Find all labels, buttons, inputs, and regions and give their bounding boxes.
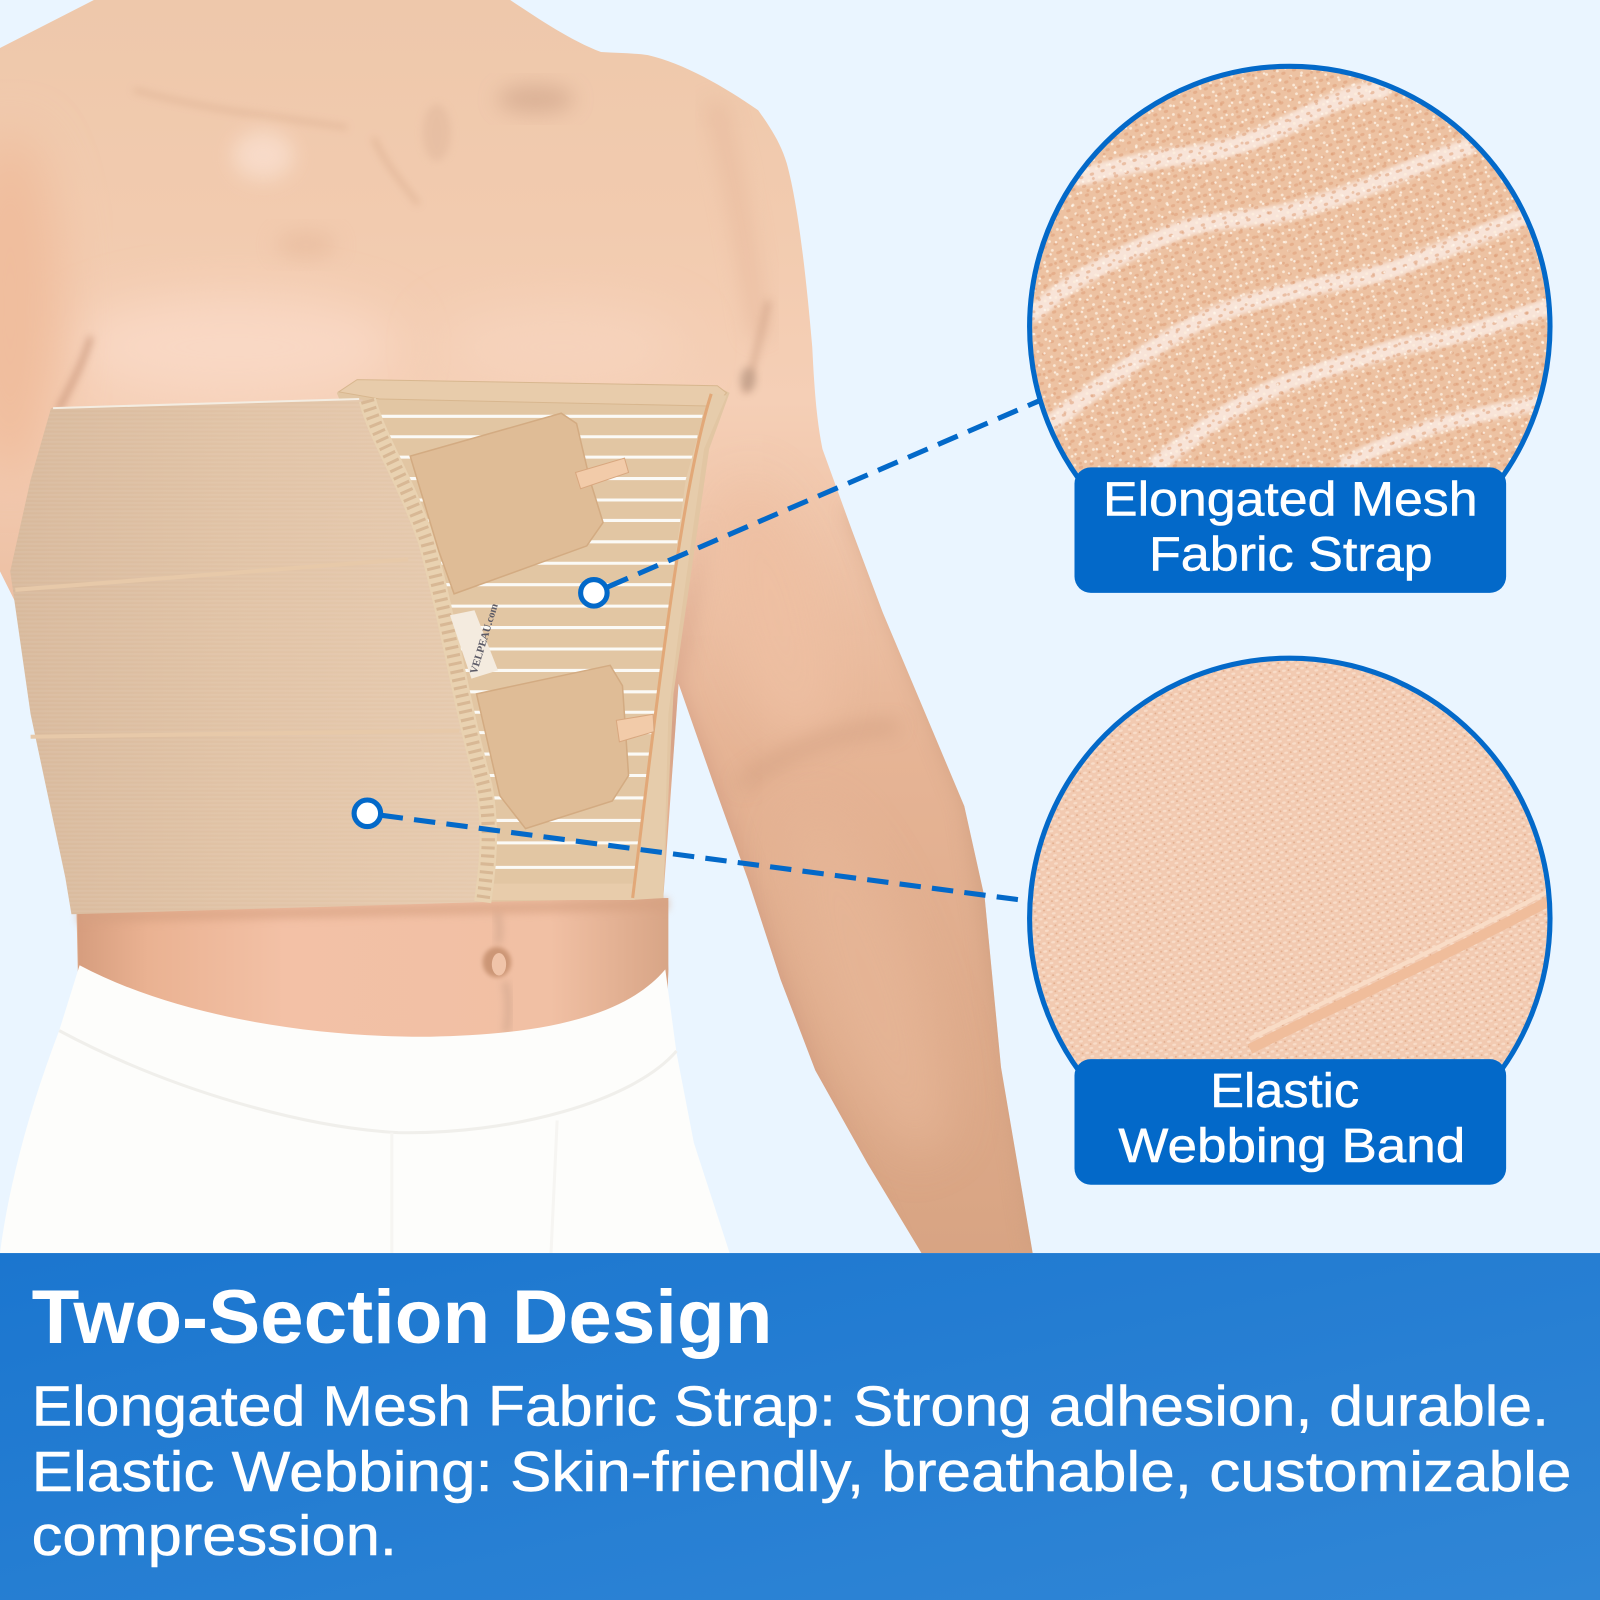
- navel: [483, 947, 511, 978]
- description: [32, 1375, 1571, 1567]
- upper tab pull: [576, 458, 629, 489]
- heading: Two-Section Design: [32, 1275, 772, 1360]
- label: elastic webbing band: Elastic: [1210, 1065, 1359, 1118]
- seam zigzag: [367, 400, 488, 902]
- mesh stripes: [381, 414, 703, 869]
- bottom text panel: [0, 1253, 1600, 1600]
- belly hair: [497, 913, 508, 1033]
- white shorts: [0, 965, 730, 1253]
- orange edge stitch: [633, 394, 711, 898]
- belly shadow under brace: [78, 898, 668, 923]
- mesh fabric texture: [1032, 68, 1548, 474]
- lower hook tab: [477, 665, 629, 829]
- webbing ribbed texture: [10, 399, 488, 914]
- fabric detail circle: elastic webbing: [1027, 656, 1553, 1070]
- navel highlight: [492, 953, 506, 976]
- callout line: elastic webbing: [354, 800, 1029, 901]
- callout line: mesh strap: [581, 401, 1039, 606]
- rib brace: [10, 380, 735, 914]
- waistband line: [59, 1031, 677, 1133]
- elastic knit texture: [1032, 660, 1548, 1066]
- label: elongated mesh fabric strap: [1074, 467, 1506, 593]
- model torso and arm photo: [0, 0, 1061, 1253]
- webbing top highlight: [53, 399, 359, 408]
- top binding: [339, 380, 727, 406]
- VELPEAU label: [450, 602, 501, 679]
- skin: torso, shoulders and arms: [0, 0, 1033, 1253]
- shorts seams: [392, 1120, 557, 1253]
- bottom binding: [482, 884, 638, 900]
- belly: [78, 898, 668, 1051]
- description: Elastic Webbing: Skin-friendly, breathable, customizable: [32, 1440, 1571, 1503]
- label: elongated mesh fabric strap: Elongated Mesh: [1103, 473, 1478, 526]
- elastic webbing panel: [10, 399, 488, 914]
- armpit creases: [58, 337, 91, 410]
- circle outline: [1030, 66, 1550, 587]
- description: compression.: [32, 1504, 397, 1567]
- fabric detail circle: mesh strap: [1027, 64, 1553, 478]
- upper arm and forearm shading: [670, 596, 834, 1102]
- label: elongated mesh fabric strap: Fabric Strap: [1149, 528, 1433, 581]
- body shadows and highlights: [0, 85, 1061, 1253]
- label: elastic webbing band: Webbing Band: [1118, 1120, 1465, 1173]
- description: Elongated Mesh Fabric Strap: Strong adhesion, durable.: [32, 1375, 1549, 1438]
- upper hook tab: [410, 413, 603, 594]
- right edge strip: [631, 392, 727, 900]
- brace back panel: mesh with white stripes: [337, 380, 730, 902]
- webbing section lines: [15, 559, 459, 737]
- circle outline: [1030, 658, 1550, 1179]
- lower tab pull: [616, 714, 654, 742]
- label: elastic webbing band: [1074, 1059, 1506, 1185]
- stitched seam: [367, 400, 488, 902]
- VELPEAU label: VELPEAU.com: [468, 602, 501, 675]
